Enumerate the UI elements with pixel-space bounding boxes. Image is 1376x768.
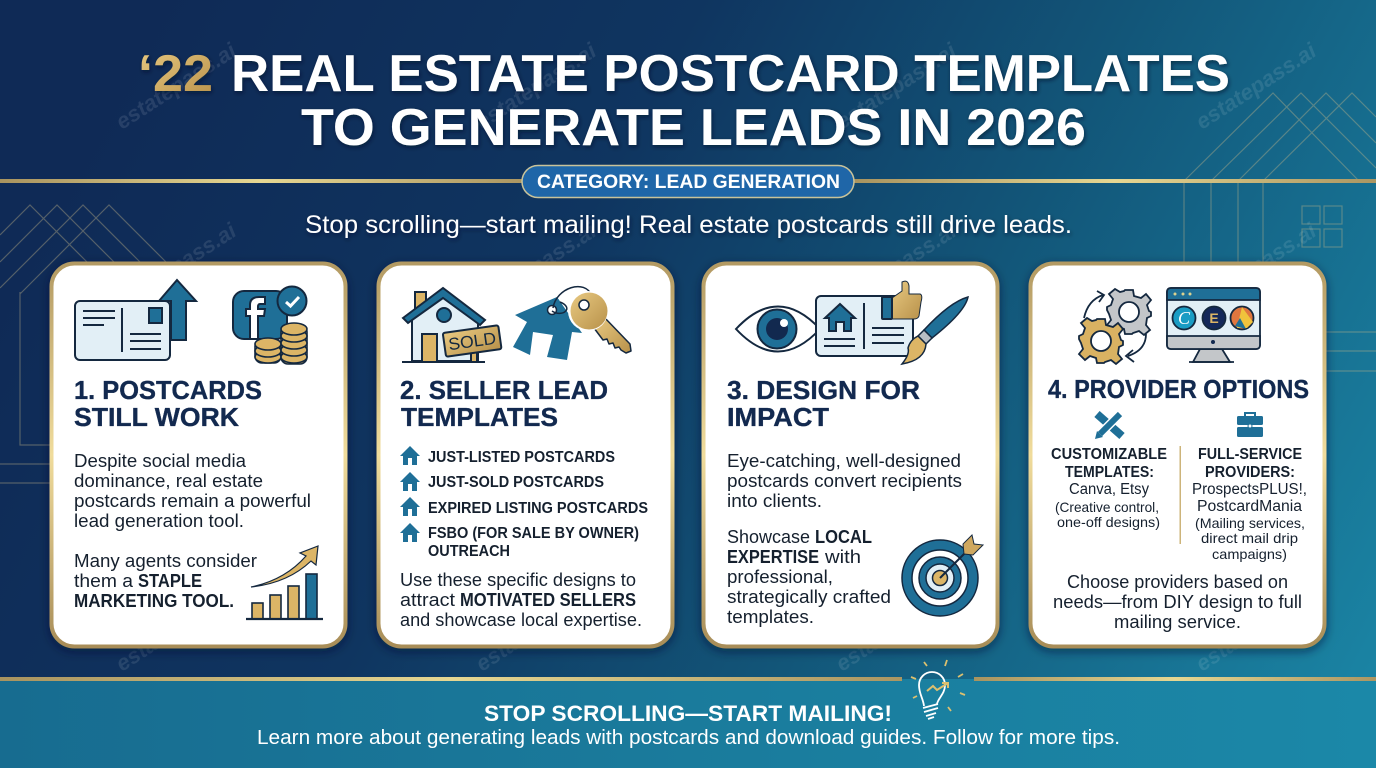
text block: attract (400, 590, 455, 610)
text block: customizable templates: TEMPLATES: (1065, 464, 1154, 481)
text block: customizable templates: (Creative control, (1055, 499, 1159, 515)
text block: full-service providers: direct mail drip (1201, 530, 1298, 546)
footer call to action: STOP SCROLLING—START MAILING! (484, 701, 892, 726)
decorative house outline: right (1184, 93, 1376, 371)
watermarks: estatepass.ai (831, 579, 961, 676)
watermarks: estatepass.ai (1191, 37, 1321, 134)
bullet list: JUST-SOLD POSTCARDS (428, 474, 604, 491)
heading (727, 377, 920, 432)
watermarks: estatepass.ai (831, 217, 961, 314)
icon: target with dart (902, 535, 983, 616)
heading: 4. PROVIDER OPTIONS (1048, 376, 1309, 404)
icon: briefcase (1237, 413, 1263, 437)
bullet list (428, 449, 648, 560)
text block: local expertise: EXPERTISE (727, 547, 819, 567)
text block: local expertise: Showcase (727, 527, 810, 547)
text block (400, 570, 642, 630)
heading: IMPACT (727, 404, 829, 432)
footer band (0, 677, 1376, 768)
icon: postcard with thumbs up (816, 281, 922, 356)
heading: 3. DESIGN FOR (727, 377, 920, 405)
text block: customizable templates: Canva, Etsy (1069, 481, 1149, 498)
text block: staple tool: them a (74, 571, 134, 591)
bullet list: OUTREACH (428, 543, 510, 560)
icon: social media badge and coins (233, 286, 307, 364)
text block: lead generation tool. (74, 511, 244, 531)
heading: 2. SELLER LEAD (400, 377, 608, 405)
title (138, 45, 1230, 157)
icon: paintbrush (902, 297, 968, 364)
heading: TEMPLATES (401, 404, 558, 432)
footer call to action: Learn more about generating leads with postcards and download guides. Follow for more tips. (257, 727, 1120, 749)
icon: eye (736, 306, 820, 352)
heading (74, 377, 262, 432)
heading (400, 377, 608, 432)
icon: postcard with up arrow (75, 280, 196, 360)
text block: full-service providers: FULL-SERVICE (1198, 446, 1302, 463)
bullet list: JUST-LISTED POSTCARDS (428, 449, 615, 466)
text block: into clients. (727, 491, 822, 511)
text block: full-service providers: ProspectsPLUS!, (1192, 481, 1307, 498)
text block: full-service providers: (Mailing services, (1195, 515, 1305, 531)
text block: Use these specific designs to (400, 570, 636, 590)
text block (74, 451, 311, 531)
icon: monitor with provider logos: E (1209, 310, 1219, 326)
icon: house with sold sign (402, 288, 502, 362)
text block: closing note: needs—from DIY design to full (1053, 592, 1302, 612)
text block: Despite social media (74, 451, 247, 471)
heading: STILL WORK (74, 404, 240, 432)
text block: full-service providers: PROVIDERS: (1205, 464, 1295, 481)
text block: local expertise: LOCAL (815, 527, 872, 547)
icon: house key fob and key (513, 287, 631, 360)
text block: staple tool (74, 551, 257, 611)
bullet list: FSBO (FOR SALE BY OWNER) (428, 525, 639, 542)
text block: dominance, real estate (74, 471, 263, 491)
text block: customizable templates: CUSTOMIZABLE (1051, 446, 1167, 463)
text block: local expertise: professional, (727, 567, 833, 587)
text block (727, 451, 962, 511)
bullet list: EXPIRED LISTING POSTCARDS (428, 500, 648, 517)
icon: house with sold sign: SOLD (447, 329, 497, 354)
watermarks: estatepass.ai (471, 579, 601, 676)
text block: closing note: mailing service. (1114, 612, 1241, 632)
panel: provider options (1030, 264, 1324, 646)
text block: full-service providers (1192, 446, 1307, 562)
text block: staple tool: Many agents consider (74, 551, 257, 571)
icon: rising bar chart (246, 546, 323, 619)
text block: staple tool: MARKETING TOOL. (74, 591, 234, 611)
text block: local expertise: with (824, 547, 861, 567)
panel: postcards still work (52, 264, 346, 646)
subtitle: Stop scrolling—start mailing! Real estate postcards still drive leads. (305, 211, 1072, 239)
icon: gears with arrows (1079, 289, 1151, 364)
text block: closing note (1053, 572, 1302, 632)
watermarks: estatepass.ai (471, 217, 601, 314)
text block: Eye-catching, well-designed (727, 451, 961, 471)
text block: full-service providers: campaigns) (1212, 546, 1287, 562)
text block: local expertise: templates. (727, 607, 814, 627)
text block: local expertise (727, 527, 891, 627)
title: ‘22 (138, 45, 213, 103)
text block: full-service providers: PostcardMania (1197, 498, 1302, 515)
icon: light bulb (911, 660, 965, 719)
title: TO GENERATE LEADS IN 2026 (301, 99, 1086, 157)
watermarks: estatepass.ai (111, 579, 241, 676)
divider (1180, 446, 1181, 544)
icon: monitor with provider logos (1167, 288, 1260, 362)
text block: local expertise: strategically crafted (727, 587, 891, 607)
watermarks: estatepass.ai (1191, 579, 1321, 676)
text block: staple tool: STAPLE (138, 571, 202, 591)
panel: design for impact (704, 264, 998, 646)
icon: pencil and ruler (1095, 414, 1122, 439)
watermarks: estatepass.ai (111, 37, 241, 134)
icon: monitor with provider logos: C (1178, 308, 1191, 328)
category pill (522, 166, 854, 198)
text block: MOTIVATED SELLERS (460, 590, 636, 610)
watermarks: estatepass.ai (1191, 217, 1321, 314)
icon list: template types (400, 446, 420, 542)
panel: seller lead templates (378, 264, 672, 646)
watermarks: estatepass.ai (471, 37, 601, 134)
text block: closing note: Choose providers based on (1067, 572, 1288, 592)
text block: postcards convert recipients (727, 471, 962, 491)
category pill: CATEGORY: LEAD GENERATION (537, 172, 840, 193)
title: REAL ESTATE POSTCARD TEMPLATES (231, 45, 1230, 103)
decorative house outline: left (0, 205, 166, 483)
watermarks: estatepass.ai (111, 217, 241, 314)
text block: postcards remain a powerful (74, 491, 311, 511)
watermarks (111, 37, 1321, 676)
text block: customizable templates: one-off designs) (1057, 514, 1160, 530)
text block: and showcase local expertise. (400, 610, 642, 630)
heading: 1. POSTCARDS (74, 377, 262, 405)
gold rule: header (0, 179, 1376, 183)
footer call to action (257, 701, 1120, 749)
text block: customizable templates (1051, 446, 1167, 530)
watermarks: estatepass.ai (831, 37, 961, 134)
